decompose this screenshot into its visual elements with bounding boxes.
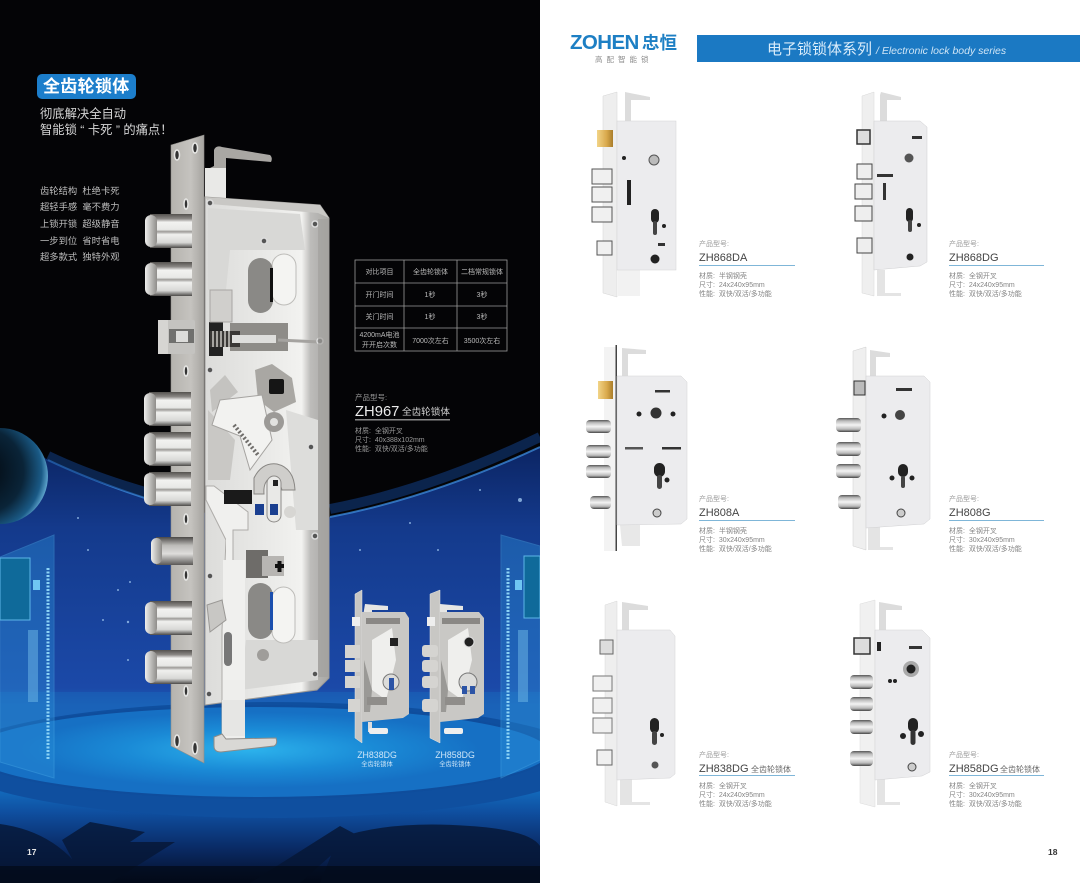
caption: ZH808G: 尺寸: 30x240x95mm — [949, 535, 1015, 544]
comparison table: 二档常规锁体 — [461, 267, 503, 276]
caption: ZH808A — [699, 494, 795, 553]
small lock captions: ZH858DG — [435, 750, 475, 760]
product: ZH838DG — [593, 601, 675, 806]
comparison table: 全齿轮锁体 — [413, 267, 448, 276]
comparison table: 对比项目 — [366, 267, 394, 276]
comparison table: 关门时间 — [366, 312, 394, 321]
caption: ZH808G — [949, 494, 1044, 553]
caption: ZH838DG: ZH838DG — [699, 763, 749, 775]
comparison table: 3秒 — [477, 312, 487, 321]
glowing platform — [0, 702, 590, 818]
caption: ZH868DG — [949, 239, 1044, 298]
small lock captions: ZH838DG — [357, 750, 397, 760]
caption: ZH808A: 产品型号: — [699, 494, 729, 503]
body screws — [206, 200, 323, 697]
rear linkage — [207, 600, 226, 632]
caption: ZH838DG: 尺寸: 24x240x95mm — [699, 790, 765, 799]
caption: ZH808G: 性能: 双快/双活/多功能 — [949, 544, 1022, 553]
caption: ZH858DG: 性能: 双快/双活/多功能 — [949, 799, 1022, 808]
dark floor shapes — [0, 822, 540, 883]
lower slot — [272, 587, 295, 643]
caption: ZH868DA: 尺寸: 24x240x95mm — [699, 280, 765, 289]
feature list: 一步到位 省时省电 — [40, 235, 120, 246]
comparison table: 7000次左右 — [412, 336, 449, 345]
comparison table: 4200mA电池 — [359, 330, 400, 339]
caption: ZH868DG: 材质: 全钢开叉 — [949, 271, 997, 280]
HUD panel: right — [501, 535, 540, 778]
caption: ZH868DA: 材质: 半钢钢壳 — [699, 271, 747, 280]
caption: ZH858DG: 尺寸: 30x240x95mm — [949, 790, 1015, 799]
small lock captions: 全齿轮锁体 — [361, 759, 393, 768]
product caption: ZH967: 材质: 全钢开叉 — [355, 426, 403, 435]
comparison table: 开门时间 — [366, 290, 394, 299]
product: ZH808G — [836, 347, 930, 550]
connecting bar — [206, 486, 248, 734]
product caption: ZH967: 性能: 双快/双活/多功能 — [355, 444, 428, 453]
platform band — [0, 692, 540, 732]
latch — [158, 320, 195, 354]
plate holes — [174, 143, 198, 754]
caption: ZH868DG: 性能: 双快/双活/多功能 — [949, 289, 1022, 298]
caption: ZH838DG — [699, 750, 795, 808]
comparison table — [355, 260, 507, 351]
spring mechanism — [209, 290, 320, 356]
product: ZH858DG — [850, 600, 930, 807]
caption: ZH808A: 材质: 半钢钢壳 — [699, 526, 747, 535]
caption: ZH868DA — [699, 239, 795, 298]
product: ZH868DA — [592, 92, 676, 297]
faceplate — [171, 135, 204, 763]
header banner: / Electronic lock body series — [875, 45, 1007, 57]
heading text: 彻底解决全自动 — [40, 106, 126, 121]
caption: ZH838DG: 性能: 双快/双活/多功能 — [699, 799, 772, 808]
left page background — [0, 0, 590, 883]
caption: ZH808A: 尺寸: 30x240x95mm — [699, 535, 765, 544]
caption: ZH808G: ZH808G — [949, 507, 991, 519]
caption: ZH858DG: 产品型号: — [949, 750, 979, 759]
stars — [77, 489, 522, 661]
shaded interior patches — [208, 208, 305, 290]
caption: ZH858DG: 全齿轮锁体 — [1000, 764, 1040, 774]
caption: ZH808A: ZH808A — [699, 507, 740, 519]
page number 18: 18 — [1048, 847, 1058, 857]
feature list: 超多款式 独特外观 — [40, 251, 120, 262]
planet — [0, 428, 48, 524]
caption: ZH808G: 材质: 全钢开叉 — [949, 526, 997, 535]
bolts — [145, 214, 192, 248]
comparison table: 1秒 — [425, 312, 435, 321]
product caption: ZH967 — [355, 392, 450, 453]
product caption: ZH967: 尺寸: 40x388x102mm — [355, 435, 425, 444]
header banner — [697, 35, 1080, 62]
badge: 全齿轮锁体 — [37, 74, 136, 99]
top hook — [206, 146, 272, 176]
caption: ZH838DG: 材质: 全钢开叉 — [699, 781, 747, 790]
caption: ZH858DG: ZH858DG — [949, 763, 999, 775]
heading text — [40, 106, 173, 137]
small lock captions: 全齿轮锁体 — [439, 759, 471, 768]
caption: ZH858DG — [949, 750, 1044, 808]
feature list: 上锁开锁 超级静音 — [40, 218, 120, 229]
upper slot — [272, 254, 296, 305]
HUD panel: left — [0, 535, 54, 778]
dark sky above the horizon — [0, 0, 540, 520]
feature list: 超轻手感 毫不费力 — [40, 201, 120, 212]
comparison table: 3500次左右 — [464, 336, 500, 345]
comparison table: 3秒 — [477, 290, 487, 299]
cam and gears — [255, 364, 296, 412]
caption: ZH868DA: ZH868DA — [699, 252, 748, 264]
lock body — [205, 197, 329, 705]
caption: ZH868DA: 产品型号: — [699, 239, 729, 248]
caption: ZH838DG: 产品型号: — [699, 750, 729, 759]
product: ZH868DG — [855, 92, 927, 296]
caption: ZH838DG: 全齿轮锁体 — [751, 764, 791, 774]
logo: ZOHEN — [570, 31, 639, 54]
header banner: 电子锁锁体系列 — [767, 41, 872, 58]
product caption: ZH967: 全齿轮锁体 — [402, 406, 450, 418]
cross keyway — [246, 550, 268, 578]
heading text: 智能锁 “ 卡死 ” 的痛点！ — [40, 122, 173, 137]
caption: ZH868DG: 尺寸: 24x240x95mm — [949, 280, 1015, 289]
caption: ZH868DA: 性能: 双快/双活/多功能 — [699, 289, 772, 298]
small lock: ZH858DG (left page) — [422, 590, 484, 743]
logo — [570, 31, 677, 64]
right page background — [540, 0, 1080, 883]
logo: 高配智能锁 — [595, 54, 652, 64]
badge: 全齿轮锁体: 全齿轮锁体 — [43, 76, 130, 96]
lower gear — [254, 464, 295, 494]
comparison table: 开开启次数 — [362, 340, 397, 349]
product caption: ZH967: 产品型号: — [355, 392, 387, 402]
product: ZH808A — [586, 345, 687, 551]
caption: ZH808A: 性能: 双快/双活/多功能 — [699, 544, 772, 553]
feature list: 齿轮结构 杜绝卡死 — [40, 185, 120, 196]
small lock: ZH838DG (left page) — [345, 590, 409, 743]
caption: ZH868DG: 产品型号: — [949, 239, 979, 248]
small lock captions — [357, 750, 475, 768]
logo: 忠恒 — [642, 33, 677, 53]
bottom hook — [222, 700, 245, 736]
comparison table: 1秒 — [425, 290, 435, 299]
right edge rail — [318, 219, 329, 677]
product caption: ZH967: ZH967 — [355, 404, 399, 420]
page number 17: 17 — [27, 847, 37, 857]
caption: ZH868DG: ZH868DG — [949, 252, 999, 264]
main lock: ZH967 — [144, 135, 329, 763]
feature list — [40, 185, 120, 262]
caption: ZH808G: 产品型号: — [949, 494, 979, 503]
caption: ZH858DG: 材质: 全钢开叉 — [949, 781, 997, 790]
